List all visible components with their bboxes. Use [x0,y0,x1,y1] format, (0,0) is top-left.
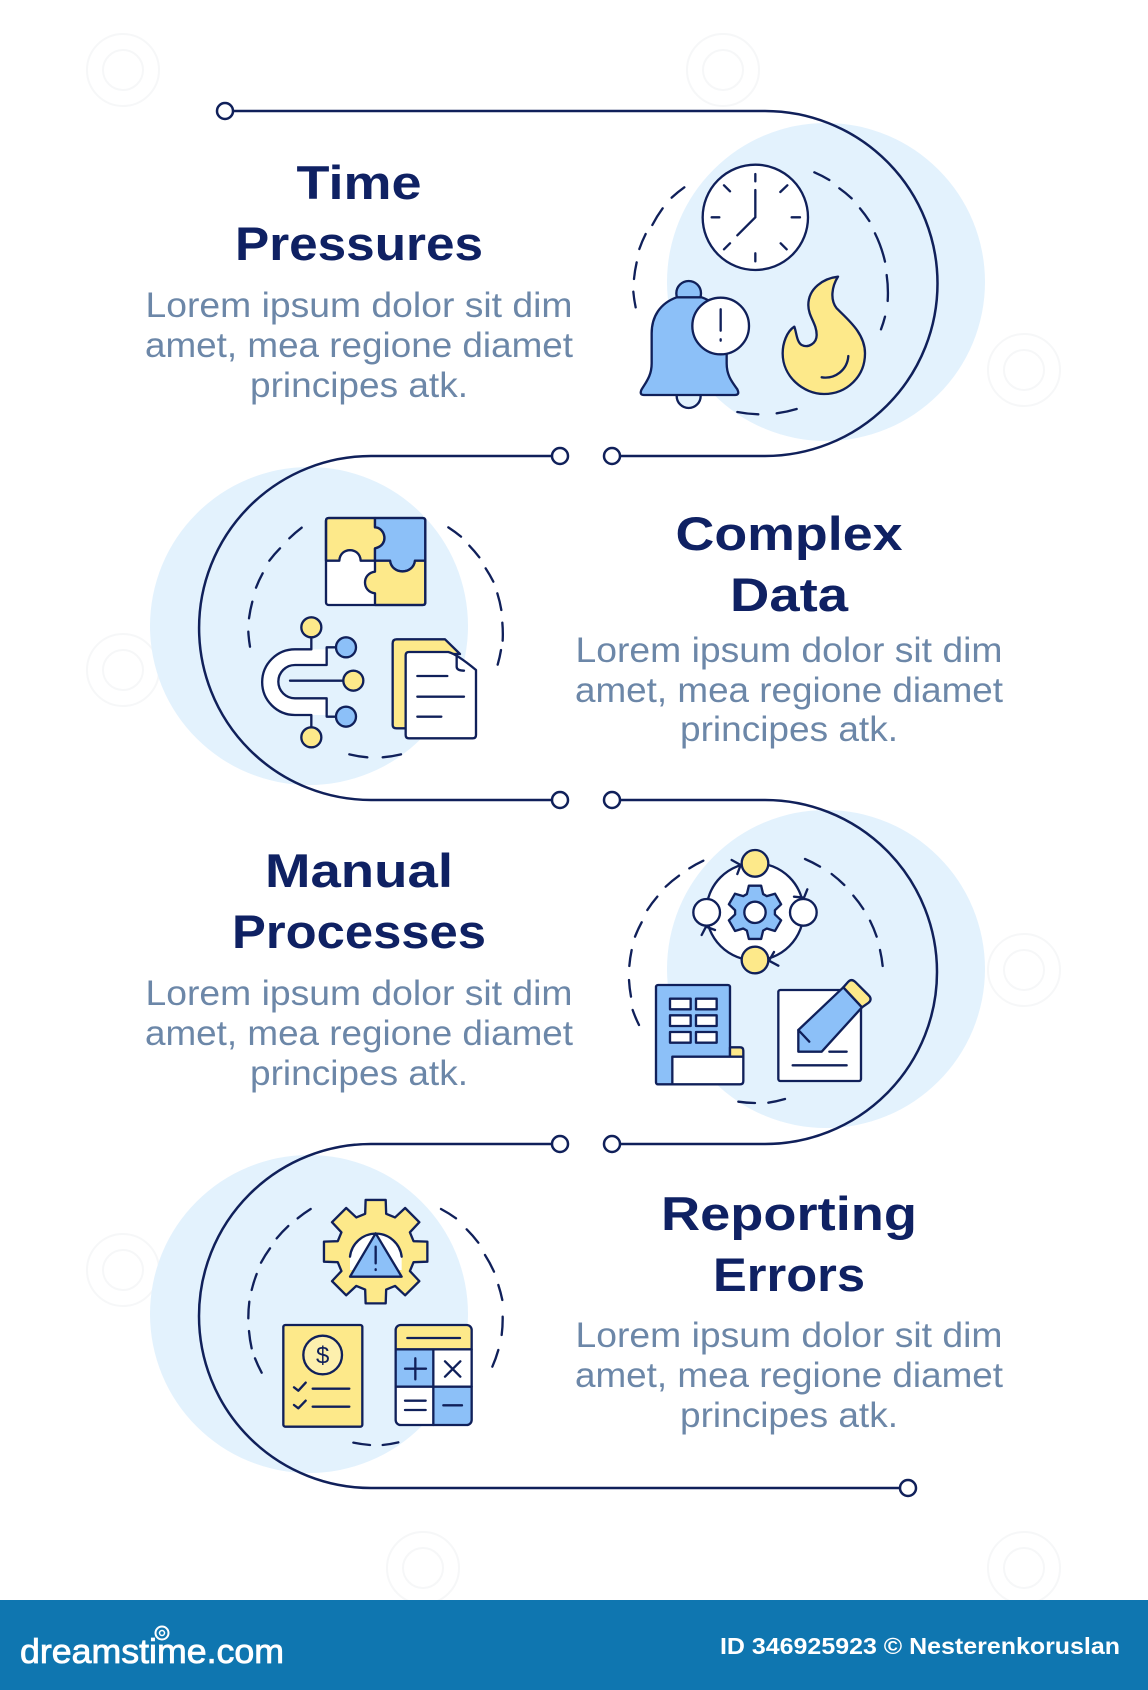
heading: Complex Data: Data [730,568,849,621]
panel: manual processes text [145,844,573,1093]
footer credit: ID 346925923 © Nesterenkoruslan [720,1633,1120,1659]
heading: Manual Processes: Manual [265,844,453,897]
body text: Manual Processes [145,974,573,1093]
panel: time pressures text [145,156,573,405]
heading: Time Pressures: Pressures [235,217,483,270]
body text: Reporting Errors [575,1316,1003,1435]
icon: puzzle [326,518,425,605]
heading: Reporting Errors [661,1187,917,1301]
body text: Time Pressures: principes atk. [250,366,468,405]
body text: Time Pressures [145,286,573,405]
connector line 3 [604,792,937,1152]
body text: Manual Processes: amet, mea regione diamet [145,1014,573,1053]
panel: reporting errors text [575,1187,1003,1435]
body text: Complex Data: Lorem ipsum dolor sit dim [576,631,1002,670]
icon: bell with alert [641,281,749,408]
heading: Reporting Errors: Reporting [661,1187,917,1240]
icon group: manual processes [629,850,883,1103]
icon group: reporting errors [248,1200,503,1445]
icon: financial report: $ [316,1342,329,1369]
icon group: complex data [248,518,503,757]
heading: Manual Processes [232,844,486,958]
icon: gear with warning [324,1200,427,1303]
dashed ring [629,859,883,1103]
icon: clock [703,165,808,270]
body text: Reporting Errors: principes atk. [680,1396,898,1435]
icon: pencil on paper [778,980,871,1081]
background circle: time pressures [667,123,985,441]
icon: process cycle with gear [693,850,817,973]
connector line 1 [217,103,938,464]
connector line 2 [199,448,568,808]
body text: Reporting Errors: amet, mea regione diamet [575,1356,1003,1395]
heading: Reporting Errors: Errors [713,1248,865,1301]
icon: calculator [396,1325,472,1425]
icon group: time pressures [633,165,888,414]
heading: Time Pressures: Time [296,156,422,209]
dashed ring [633,172,888,414]
heading: Manual Processes: Processes [232,905,486,958]
footer bar [0,1600,1148,1690]
icon: building spreadsheet [656,985,743,1084]
body text: Time Pressures: Lorem ipsum dolor sit dim [146,286,572,325]
body text: Manual Processes: principes atk. [250,1054,468,1093]
body text: Complex Data: amet, mea regione diamet [575,671,1003,710]
icon: financial report [283,1325,362,1427]
connector line 4 [199,1136,916,1496]
icon: documents [393,639,476,738]
heading: Time Pressures [235,156,483,270]
background circle: complex data [150,467,468,785]
icon: data branches [262,617,363,747]
body text: Reporting Errors: Lorem ipsum dolor sit dim [576,1316,1002,1355]
background circle: manual processes [667,810,985,1128]
body text: Manual Processes: Lorem ipsum dolor sit dim [146,974,572,1013]
heading: Complex Data: Complex [676,507,902,560]
body text: Time Pressures: amet, mea regione diamet [145,326,573,365]
heading: Complex Data [676,507,902,621]
background circle: reporting errors [150,1155,468,1473]
panel: complex data text [575,507,1003,749]
body text: Complex Data [575,631,1003,749]
dashed ring [248,1209,503,1445]
dashed ring [248,527,503,757]
body text: Complex Data: principes atk. [680,710,898,749]
icon: flame [783,277,865,394]
footer logo: dreamstime.com [20,1633,284,1671]
